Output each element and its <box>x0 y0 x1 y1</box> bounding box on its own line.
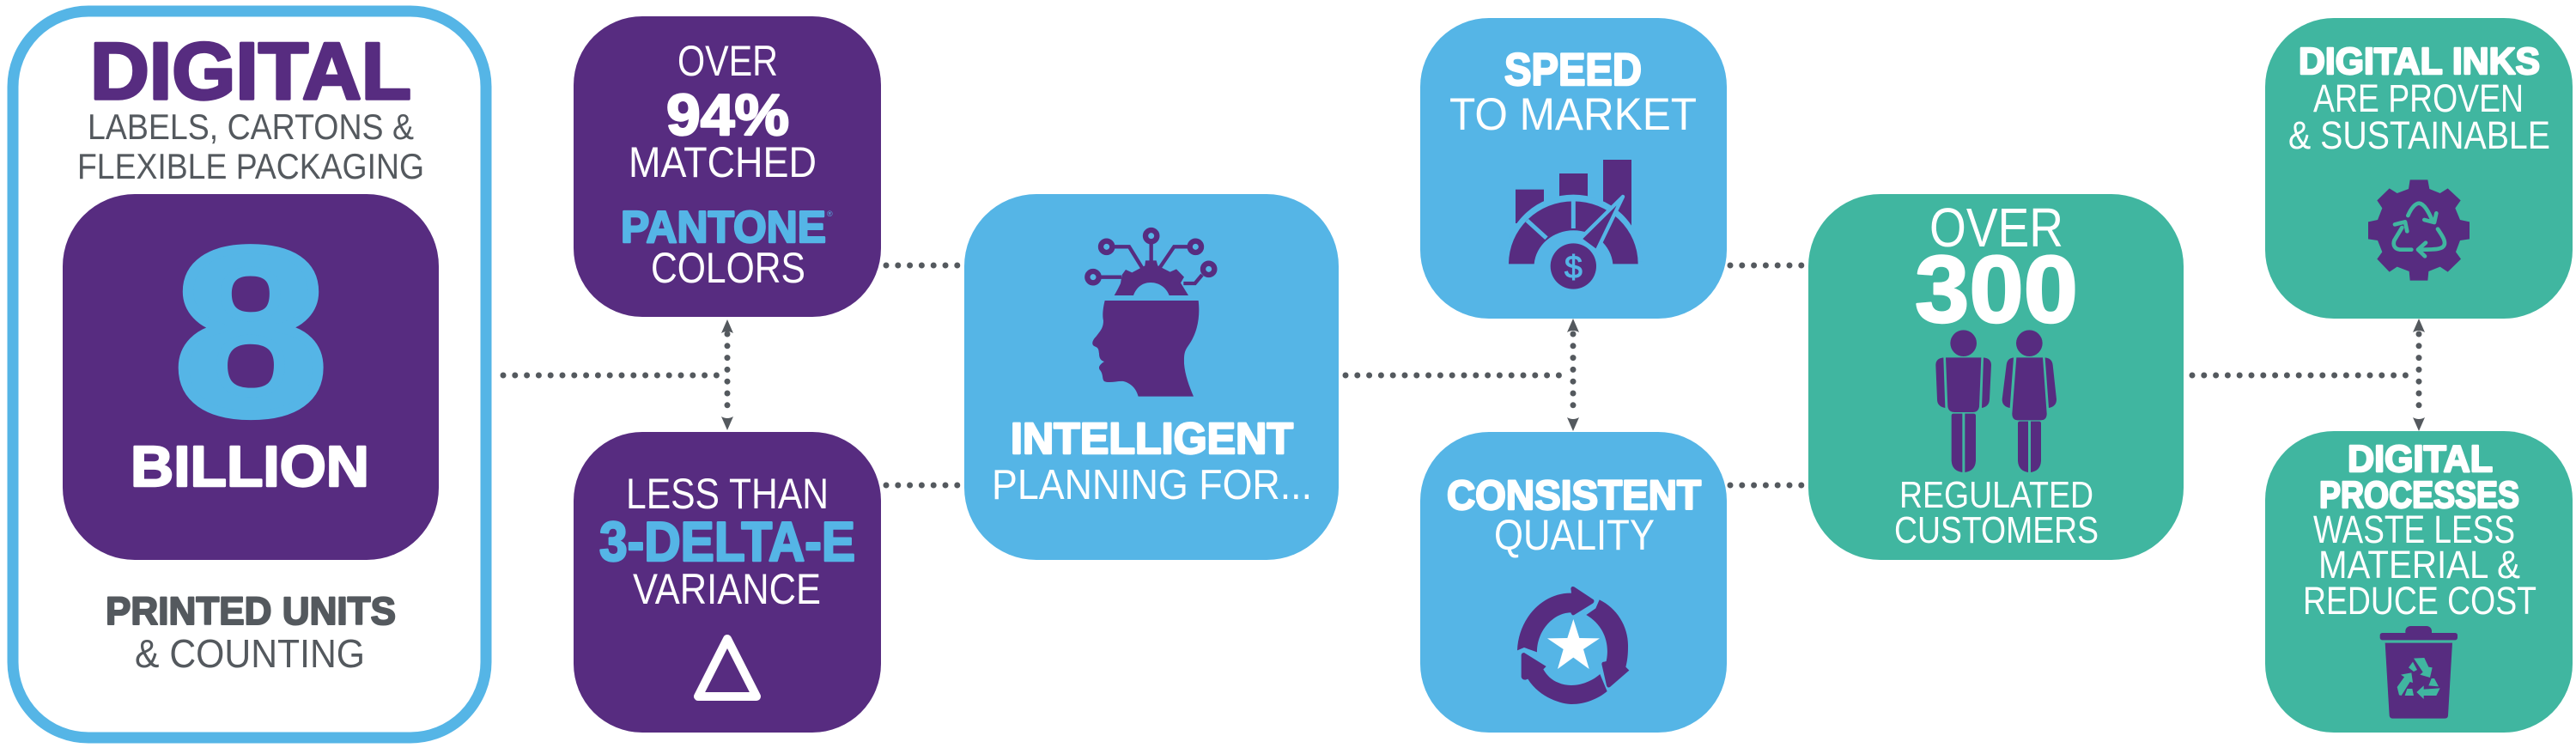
panel: over 300 regulated customers <box>1808 194 2184 560</box>
icon: man and woman <box>1935 330 2057 472</box>
text: printed units and counting <box>106 589 396 676</box>
panel: pantone colors <box>574 16 881 317</box>
text: colors: COLORS <box>651 244 805 292</box>
connector: regulated customers to green boxes <box>2192 319 2425 431</box>
number: 8: 8 <box>175 201 326 464</box>
icon: circular arrows with star <box>1517 587 1629 704</box>
text: labels, cartons and flexible packaging <box>77 106 424 186</box>
heading: speed: SPEED <box>1504 45 1642 95</box>
text: are proven and sustainable: ARE PROVEN <box>2313 76 2524 120</box>
icon: delta triangle <box>698 639 756 696</box>
icon: head with gear and circuits <box>1087 230 1214 397</box>
panel: digital 8 billion <box>13 11 486 738</box>
connector: digital panel to purple boxes <box>503 265 963 485</box>
text: pantone: PANTONE <box>621 203 826 252</box>
icon: recycling bin <box>2380 626 2458 719</box>
text: over: OVER <box>1929 197 2063 258</box>
connector: intelligent planning to blue boxes <box>1346 265 1805 485</box>
text: to market: TO MARKET <box>1449 89 1697 140</box>
panel: digital inks <box>2265 18 2573 319</box>
heading: consistent: CONSISTENT <box>1447 473 1701 519</box>
number: 300: 300 <box>1915 237 2078 343</box>
text: waste less material and reduce cost: MATERIAL & <box>2318 543 2520 587</box>
text: printed units and counting: PRINTED UNITS <box>106 589 396 633</box>
panel: digital processes <box>2265 431 2573 733</box>
heading: digital: DIGITAL <box>90 26 411 116</box>
text: are proven and sustainable <box>2288 76 2550 157</box>
text: over: OVER <box>677 37 778 85</box>
panel: delta e variance <box>574 432 881 733</box>
label: billion: BILLION <box>131 435 369 499</box>
mark: registered: ® <box>827 210 833 218</box>
number: 94%: 94% <box>666 82 789 148</box>
text: labels, cartons and flexible packaging: LABELS, CARTONS & <box>88 106 414 147</box>
heading: digital processes <box>2319 438 2519 516</box>
text: regulated customers: REGULATED <box>1899 474 2093 516</box>
icon: speedometer with bars: $ <box>1564 248 1583 284</box>
panel: consistent quality <box>1420 432 1727 733</box>
panel: intelligent planning <box>964 194 1339 560</box>
text: quality: QUALITY <box>1494 511 1655 559</box>
text: waste less material and reduce cost <box>2303 508 2537 623</box>
heading: digital inks: DIGITAL INKS <box>2299 40 2540 82</box>
text: matched: MATCHED <box>629 138 817 186</box>
text: variance: VARIANCE <box>633 565 821 613</box>
text: regulated customers: CUSTOMERS <box>1894 509 2099 551</box>
heading: digital processes: PROCESSES <box>2319 474 2519 516</box>
heading: intelligent: INTELLIGENT <box>1011 414 1293 463</box>
text: printed units and counting: & COUNTING <box>135 631 365 676</box>
text: labels, cartons and flexible packaging: FLEXIBLE PACKAGING <box>77 146 424 186</box>
heading: digital processes: DIGITAL <box>2348 438 2493 480</box>
text: planning for: PLANNING FOR... <box>992 462 1312 508</box>
text: less than: LESS THAN <box>626 470 829 518</box>
icon: recycling gear <box>2368 179 2470 281</box>
text: waste less material and reduce cost: WASTE LESS <box>2313 508 2515 551</box>
panel: speed to market <box>1420 18 1727 319</box>
text: waste less material and reduce cost: REDUCE COST <box>2303 579 2537 623</box>
text: regulated customers <box>1894 474 2099 551</box>
icon: speedometer with bars <box>1509 160 1638 289</box>
panel: 8 billion number <box>63 194 439 560</box>
number: 3-delta-e: 3-DELTA-E <box>599 510 855 573</box>
